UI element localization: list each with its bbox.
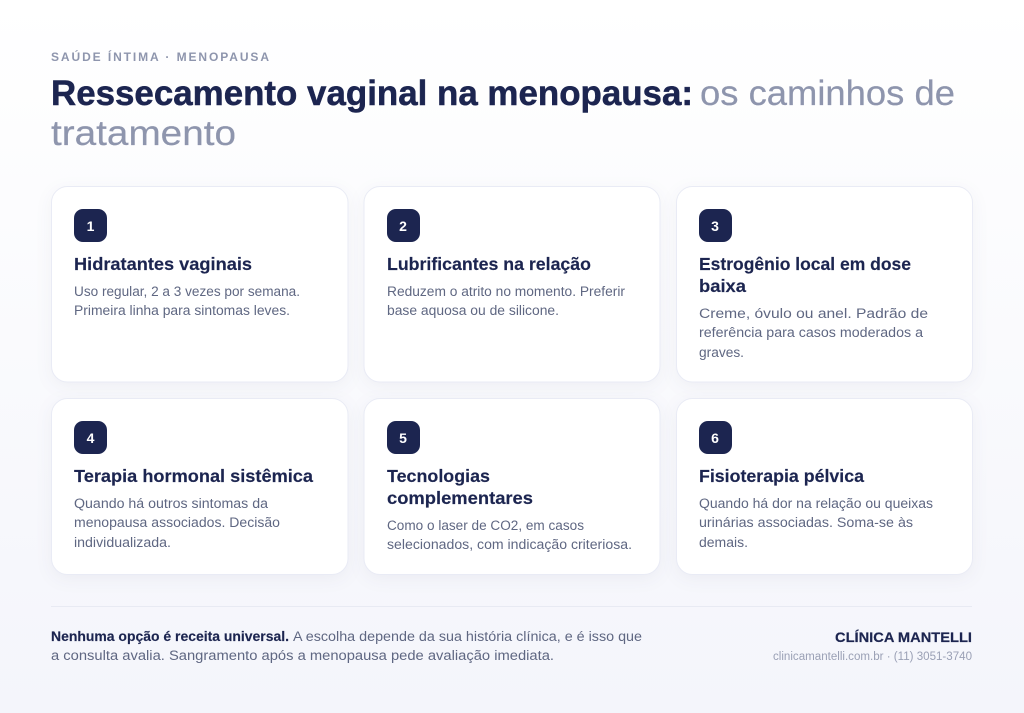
title: os caminhos de — [700, 74, 955, 113]
body 6: urinárias associadas. Soma-se às — [699, 515, 913, 530]
body 3: graves. — [699, 345, 744, 360]
badge 3: 3 — [711, 218, 719, 234]
heading 4: Terapia hormonal sistêmica — [74, 466, 313, 486]
heading 3: Estrogênio local em dose — [699, 254, 911, 274]
body 1: Uso regular, 2 a 3 vezes por semana. — [74, 284, 300, 299]
heading 1: Hidratantes vaginais — [74, 254, 252, 274]
panel: card 2 — [364, 186, 660, 382]
footer note — [51, 629, 642, 663]
title: Ressecamento vaginal na menopausa: — [51, 74, 693, 113]
title — [51, 74, 955, 153]
badge 1: 1 — [87, 218, 95, 234]
badge 4: 4 — [87, 430, 95, 446]
body 6: Quando há dor na relação ou queixas — [699, 496, 933, 511]
badge 1 — [74, 209, 107, 242]
body 4 — [74, 496, 280, 550]
body 5: selecionados, com indicação criteriosa. — [387, 537, 632, 552]
heading 3: baixa — [699, 276, 746, 296]
body 2 — [387, 284, 626, 318]
badge 6 — [699, 421, 732, 454]
panel: card 5 — [364, 398, 660, 574]
heading 6: Fisioterapia pélvica — [699, 466, 864, 486]
title: tratamento — [51, 114, 236, 153]
body 3: referência para casos moderados a — [699, 325, 924, 340]
body 5: Como o laser de CO2, em casos — [387, 518, 584, 533]
footer note: A escolha depende da sua história clínica, e é isso que — [293, 629, 642, 644]
body 4: individualizada. — [74, 535, 171, 550]
panel: card 6 — [676, 398, 972, 574]
footer note: a consulta avalia. Sangramento após a menopausa pede avaliação imediata. — [51, 648, 554, 663]
badge 2: 2 — [399, 218, 407, 234]
badge 5 — [387, 421, 420, 454]
body 2: base aquosa ou de silicone. — [387, 303, 559, 318]
badge 3 — [699, 209, 732, 242]
body 2: Reduzem o atrito no momento. Preferir — [387, 284, 626, 299]
body 5 — [387, 518, 632, 552]
body 6: demais. — [699, 535, 748, 550]
heading 2: Lubrificantes na relação — [387, 254, 591, 274]
heading 5: Tecnologias — [387, 466, 490, 486]
eyebrow: SAÚDE ÍNTIMA · MENOPAUSA — [51, 49, 269, 64]
heading 3 — [699, 254, 911, 296]
clinic contact: clinicamantelli.com.br · (11) 3051-3740 — [773, 651, 972, 663]
panel: card 1 — [52, 186, 348, 382]
body 3 — [699, 306, 928, 360]
badge 5: 5 — [399, 430, 407, 446]
heading 5: complementares — [387, 488, 533, 508]
panel: card 4 — [52, 398, 348, 574]
heading 5 — [387, 466, 533, 508]
body 1: Primeira linha para sintomas leves. — [74, 303, 290, 318]
body 1 — [74, 284, 300, 318]
body 4: menopausa associados. Decisão — [74, 515, 280, 530]
body 3: Creme, óvulo ou anel. Padrão de — [699, 306, 928, 321]
clinic brand: CLÍNICA MANTELLI — [835, 629, 972, 645]
badge 2 — [387, 209, 420, 242]
panel: card 3 — [676, 186, 972, 382]
body 4: Quando há outros sintomas da — [74, 496, 269, 511]
body 6 — [699, 496, 933, 550]
badge 6: 6 — [711, 430, 719, 446]
badge 4 — [74, 421, 107, 454]
footer note: Nenhuma opção é receita universal. — [51, 629, 289, 644]
